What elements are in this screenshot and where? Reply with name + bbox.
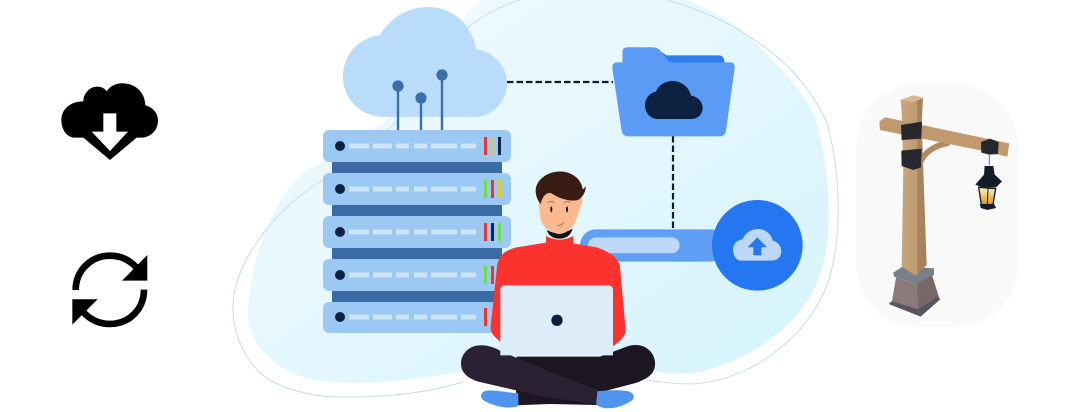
server unit 5 [323, 302, 511, 333]
laptop [500, 285, 613, 355]
icon: sync arrows [72, 255, 147, 325]
hair [536, 172, 586, 204]
server unit 2 [323, 173, 511, 205]
legs [461, 345, 655, 405]
dashed connector: folder to upload bar [672, 136, 674, 231]
face [538, 180, 583, 234]
stone base [889, 266, 940, 317]
torso red sweater [491, 236, 626, 346]
upload circle button [712, 200, 803, 291]
antennas [392, 69, 448, 130]
cloud [343, 7, 507, 117]
feet [481, 390, 634, 408]
server unit 3 [323, 216, 511, 248]
lamp post image panel [856, 84, 1018, 327]
person [461, 172, 655, 408]
server unit 4 [323, 259, 511, 291]
neck collar shadow [547, 229, 573, 239]
dashed connector: cloud to folder [507, 81, 613, 83]
crossbeam [879, 117, 1009, 157]
brace [916, 140, 950, 167]
upload bar with button [580, 200, 803, 291]
folder with cloud [612, 47, 735, 136]
iron brackets [901, 122, 999, 170]
server stack [323, 130, 511, 333]
post cap [901, 95, 923, 103]
lamp post [879, 95, 1009, 317]
eyes and mouth [548, 201, 570, 225]
server unit 1 [323, 130, 511, 162]
wooden post [901, 95, 927, 276]
icon: cloud download [61, 83, 158, 160]
background blob [233, 0, 838, 397]
hanging lantern [975, 155, 1002, 210]
